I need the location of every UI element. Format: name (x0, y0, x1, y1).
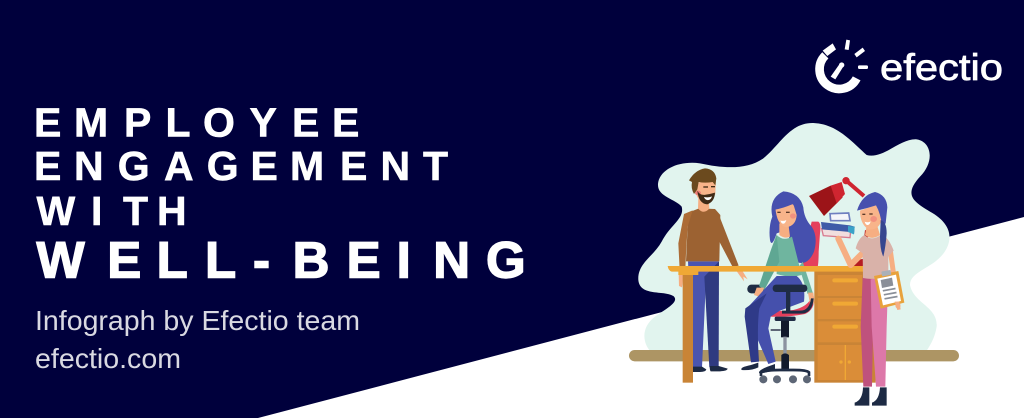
desk drawers (818, 275, 872, 380)
subtitle: website: efectio.com (35, 343, 181, 374)
standing woman braid (880, 220, 887, 257)
standing woman (838, 192, 904, 406)
man eyes (703, 186, 715, 188)
man trousers (688, 261, 719, 367)
desk leg (683, 271, 693, 383)
standing woman hair (857, 192, 887, 226)
title line: engagement: ENGAGEMENT (34, 143, 448, 189)
seated woman face (775, 204, 797, 227)
man face (695, 178, 716, 202)
seated woman smile (780, 220, 786, 224)
title line: well-being: WELL-BEING (36, 232, 526, 288)
man hair (689, 168, 716, 194)
office chair (747, 222, 820, 383)
top book (830, 213, 850, 221)
desk (668, 266, 876, 383)
standing woman neck (865, 226, 880, 238)
standing woman smile (865, 221, 871, 225)
drawer pulls (832, 278, 858, 380)
standing woman face (860, 205, 882, 229)
icon: efectio sunburst (820, 40, 868, 89)
chair base (759, 317, 811, 383)
man shoes (693, 366, 728, 372)
chair back (800, 222, 820, 270)
seated woman hands (754, 288, 815, 304)
standing woman shirt (856, 235, 894, 279)
middle book (821, 222, 855, 234)
bottom book (822, 229, 851, 238)
desk cabinet (814, 271, 876, 383)
standing woman eyes (862, 213, 873, 215)
illustration: office scene (629, 123, 959, 406)
desk lamp (809, 177, 869, 266)
logo wordmark: efectio (880, 47, 1003, 88)
background blob (638, 123, 949, 352)
seated woman arms (759, 234, 813, 294)
standing woman hand (895, 302, 901, 310)
title (34, 100, 526, 288)
seated woman shoes (741, 363, 775, 373)
chair armrest and support in front of woman (773, 285, 814, 314)
desk top (668, 266, 865, 275)
seated woman blush (790, 213, 796, 219)
title line: employee: EMPLOYEE (34, 100, 359, 146)
title line: with: WITH (36, 188, 187, 234)
seated woman top (777, 235, 802, 276)
standing woman blush (870, 216, 877, 222)
lamp arm (847, 181, 864, 196)
subtitle: credit line: Infograph by Efectio team (35, 305, 360, 336)
man hands (679, 266, 748, 287)
standing woman trousers (861, 275, 888, 387)
seated woman neck (779, 223, 790, 238)
seated woman hair back (770, 191, 816, 263)
man smile (704, 196, 712, 200)
white diagonal wedge (258, 217, 1024, 418)
floor line (629, 350, 959, 361)
chair seat (768, 297, 814, 317)
chair left armrest (747, 285, 764, 293)
seated woman hair front (773, 196, 798, 212)
logo (820, 40, 1003, 89)
standing woman right arm (890, 251, 898, 306)
seated woman eyes (777, 212, 790, 213)
books (821, 213, 855, 238)
man blush (695, 191, 701, 195)
seated woman trousers (745, 276, 804, 364)
lamp shade (809, 186, 843, 216)
man beard (697, 191, 715, 204)
man sweater (678, 208, 739, 277)
man neck (698, 198, 709, 212)
clipboard (874, 270, 904, 309)
man (678, 168, 748, 372)
seated woman (741, 191, 816, 373)
lamp base (850, 230, 869, 266)
standing woman left arm (838, 239, 862, 265)
standing woman boots (855, 387, 887, 406)
